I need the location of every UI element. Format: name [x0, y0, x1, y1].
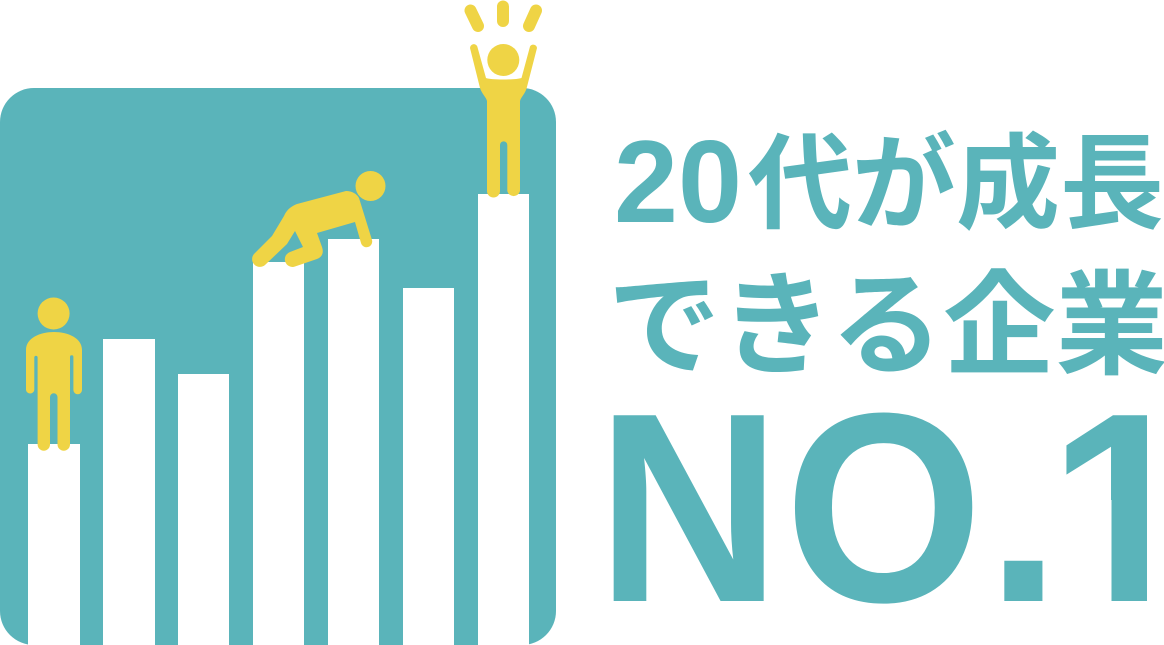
panel: teal background — [0, 88, 556, 645]
heading: line 1: 20 — [614, 116, 742, 247]
heading: line 1 — [614, 116, 1164, 247]
icon: cheer marks — [470, 6, 536, 26]
icon: cheering person on top bar — [470, 6, 537, 198]
icon: standing person — [26, 298, 82, 451]
heading: line 1: 代が成長 — [748, 127, 1164, 243]
bar chart: rising white bars — [28, 194, 529, 645]
icon: climbing person — [252, 171, 386, 267]
heading: NO.1 — [614, 412, 1147, 604]
heading: line 2: できる企業 — [608, 263, 1164, 389]
